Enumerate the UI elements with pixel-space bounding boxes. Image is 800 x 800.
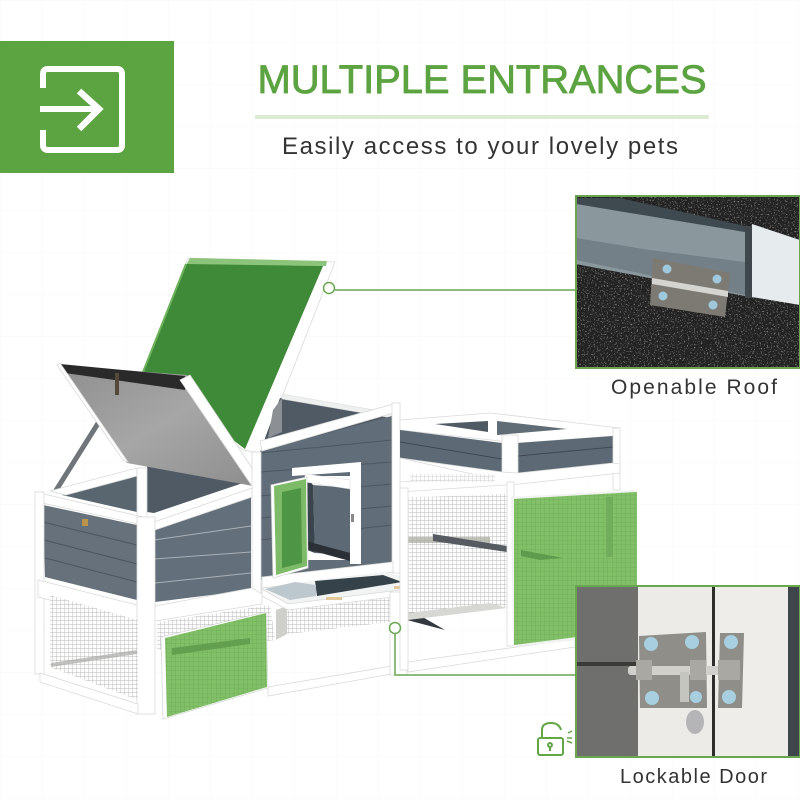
- house white frame: [260, 403, 400, 588]
- small green door: [271, 477, 308, 578]
- house back wall: [260, 398, 392, 470]
- hutch centre post: [252, 452, 261, 602]
- callout: door line: [390, 622, 577, 675]
- left box white frame: [35, 488, 262, 714]
- callout: roof line: [324, 282, 577, 294]
- house front wall: [260, 416, 392, 580]
- icon: padlock: [538, 723, 572, 755]
- right white frame: [400, 428, 620, 492]
- centre post: [390, 592, 407, 675]
- house doorway: [292, 462, 361, 564]
- centre rear wire mesh: [276, 598, 390, 640]
- left box interior: [62, 466, 243, 513]
- right wire mesh: [408, 474, 507, 620]
- floor beam: [268, 666, 392, 696]
- left run wire mesh: [40, 595, 275, 714]
- left green door: [161, 612, 268, 719]
- icon: entrance arrow: [40, 69, 122, 150]
- panel: lockable door photo: [576, 586, 800, 757]
- left box back frame: [50, 468, 147, 518]
- grey perch bar: [433, 534, 507, 552]
- opened left lid: [57, 363, 260, 486]
- panel: openable roof photo: [576, 196, 800, 368]
- panel: green icon badge: [0, 41, 174, 173]
- label: openable roof: Openable Roof: [611, 376, 777, 399]
- label: lockable door: Lockable Door: [620, 766, 767, 788]
- right posts and floor beam: [400, 482, 575, 672]
- title: MULTIPLE ENTRANCES: [258, 58, 706, 102]
- right top walls: [400, 430, 613, 473]
- right top interior: [400, 413, 620, 443]
- illustration: pet hutch: [35, 258, 637, 719]
- open tray door: [262, 572, 432, 610]
- subtitle: Easily access to your lovely pets: [282, 133, 678, 160]
- raised green roof: [143, 258, 335, 453]
- right green door: [511, 490, 637, 647]
- title underline: [255, 115, 709, 119]
- ramp: [407, 608, 445, 630]
- left lid support: [55, 417, 102, 492]
- left box walls: [43, 495, 251, 602]
